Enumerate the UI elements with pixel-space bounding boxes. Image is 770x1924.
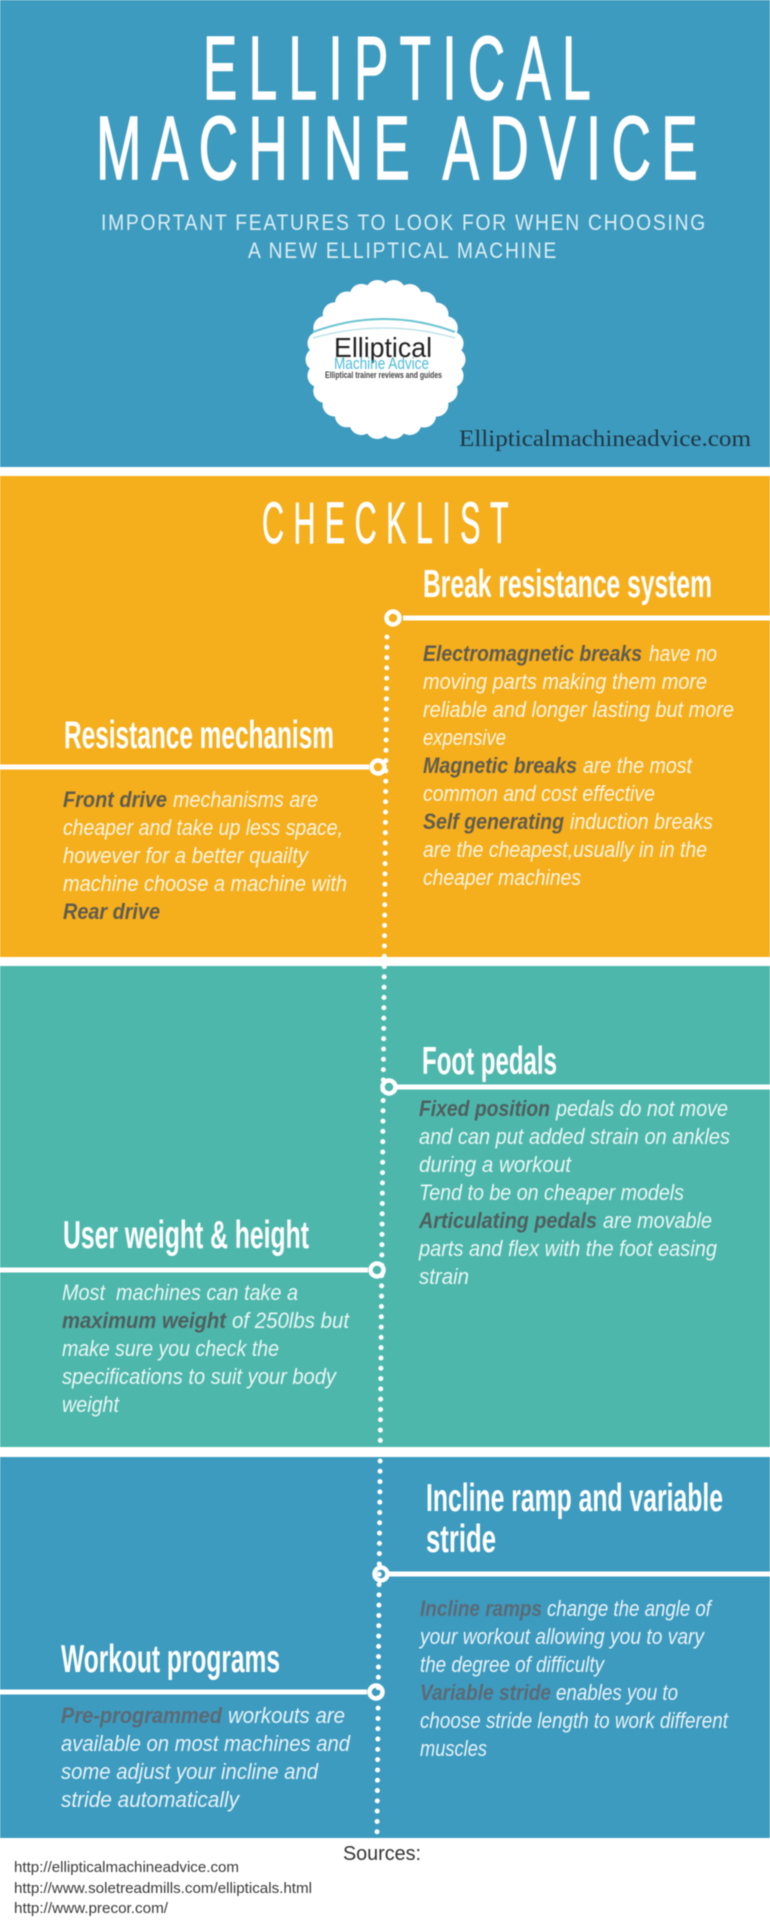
text: foot pedals: during a workout	[419, 1152, 572, 1177]
text: foot pedals: Fixed position	[419, 1096, 550, 1121]
timeline dotted line	[377, 637, 387, 1836]
text: incline ramp: change the angle of	[547, 1596, 713, 1621]
text: user weight	[62, 1280, 350, 1417]
text: break resistance: are the most	[583, 753, 693, 778]
text: user weight: Most machines can take a	[62, 1280, 298, 1305]
text: incline ramp: Variable stride	[420, 1680, 551, 1705]
text: workout programs: some adjust your incline and	[61, 1759, 319, 1784]
title	[96, 19, 708, 199]
text: user weight: specifications to suit your body	[62, 1364, 338, 1389]
subtitle: A NEW ELLIPTICAL MACHINE	[248, 238, 558, 263]
text: workout programs	[61, 1703, 351, 1812]
sources: http://ellipticalmachineadvice.com	[14, 1859, 239, 1876]
text: incline ramp	[418, 1596, 729, 1761]
checklist heading: CHECKLIST	[262, 491, 518, 556]
text: resistance mechanism: Front drive	[63, 787, 167, 812]
text: resistance mechanism: mechanisms are	[173, 787, 318, 812]
connector: resistance mechanism	[0, 760, 384, 774]
text: incline ramp: enables you to	[556, 1680, 678, 1705]
text: break resistance: expensive	[423, 725, 506, 750]
text: incline ramp: the degree of difficulty	[420, 1652, 606, 1677]
text: workout programs: workouts are	[228, 1703, 345, 1728]
panel: header	[0, 0, 770, 467]
text: break resistance: common and cost effective	[423, 781, 655, 806]
text: user weight: maximum weight	[62, 1308, 228, 1333]
text: workout programs: stride automatically	[61, 1787, 241, 1812]
text: break resistance	[423, 641, 734, 890]
sources	[14, 1843, 421, 1917]
connector: foot pedals	[382, 1080, 770, 1094]
text: foot pedals: Tend to be on cheaper models	[419, 1180, 684, 1205]
heading: incline ramp and variable stride	[426, 1477, 723, 1561]
text: break resistance: Magnetic breaks	[423, 753, 577, 778]
text: incline ramp: Incline ramps	[420, 1596, 542, 1621]
text: foot pedals: and can put added strain on ankles	[419, 1124, 730, 1149]
connector: incline ramp	[374, 1568, 770, 1580]
heading: foot pedals: Foot pedals	[422, 1040, 557, 1083]
text: foot pedals: Articulating pedals	[418, 1208, 597, 1233]
text: break resistance: induction breaks	[570, 809, 713, 834]
panel: teal section	[0, 966, 770, 1447]
logo badge: Elliptical	[334, 332, 432, 363]
connector: user weight	[0, 1264, 384, 1276]
text: break resistance: reliable and longer lasting but more	[423, 697, 734, 722]
text: break resistance: moving parts making them more	[423, 669, 707, 694]
text: user weight: weight	[62, 1392, 120, 1417]
text: foot pedals: parts and flex with the foot easing	[418, 1236, 718, 1261]
text: user weight: of 250lbs but	[232, 1308, 350, 1333]
sources: http://www.soletreadmills.com/ellipticals.html	[14, 1880, 312, 1897]
heading: workout programs: Workout programs	[61, 1638, 280, 1681]
text: resistance mechanism: cheaper and take up less space,	[63, 815, 343, 840]
subtitle	[101, 210, 707, 263]
text: break resistance: Self generating	[423, 809, 564, 834]
text: incline ramp: muscles	[420, 1736, 487, 1761]
heading: incline ramp and variable stride: stride	[426, 1518, 496, 1561]
text: user weight: make sure you check the	[62, 1336, 279, 1361]
text: break resistance: have no	[649, 641, 717, 666]
text: resistance mechanism	[63, 787, 347, 924]
heading: user weight and height: User weight & height	[63, 1214, 309, 1257]
text: incline ramp: choose stride length to work different	[420, 1708, 729, 1733]
text: incline ramp: your workout allowing you to vary	[418, 1624, 706, 1649]
text: break resistance: Electromagnetic breaks	[423, 641, 642, 666]
text: foot pedals	[418, 1096, 730, 1289]
panel: amber checklist	[0, 476, 770, 957]
text: workout programs: Pre-programmed	[61, 1703, 222, 1728]
text: resistance mechanism: however for a better quailty	[63, 843, 310, 868]
text: resistance mechanism: machine choose a machine with	[63, 871, 347, 896]
sources: http://www.precor.com/	[14, 1900, 169, 1917]
heading: resistance mechanism: Resistance mechanism	[64, 714, 334, 757]
text: break resistance: are the cheapest,usually in in the	[423, 837, 707, 862]
text: foot pedals: strain	[419, 1264, 469, 1289]
logo badge	[313, 290, 456, 430]
text: foot pedals: pedals do not move	[555, 1096, 728, 1121]
text: foot pedals: are movable	[603, 1208, 712, 1233]
panel: blue section	[0, 1457, 770, 1838]
connector: workout programs	[0, 1686, 382, 1698]
logo badge: Machine Advice	[334, 354, 429, 373]
website url: Ellipticalmachineadvice.com	[459, 426, 751, 451]
connector: break resistance	[386, 612, 770, 624]
sources: Sources:	[343, 1843, 421, 1865]
text: workout programs: available on most machines and	[61, 1731, 351, 1756]
logo badge: Elliptical trainer reviews and guides	[325, 370, 442, 380]
text: break resistance: cheaper machines	[423, 865, 581, 890]
text: resistance mechanism: Rear drive	[63, 899, 160, 924]
